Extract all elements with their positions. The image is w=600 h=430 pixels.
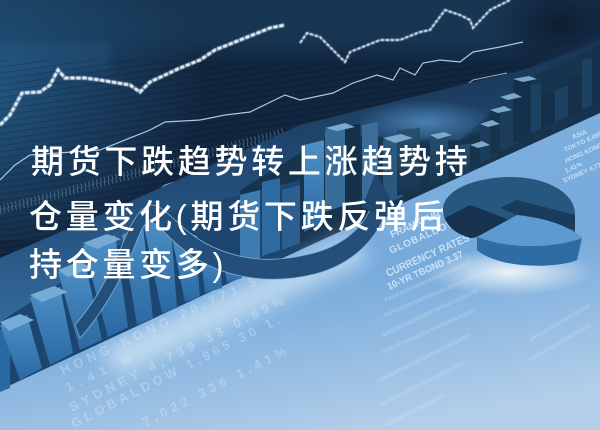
stock line charts xyxy=(0,0,523,212)
title xyxy=(29,143,471,283)
volume ticks xyxy=(0,130,285,212)
title: 期货下跌趋势转上涨趋势持 xyxy=(31,143,471,180)
arrow head xyxy=(362,172,397,218)
white trend line, right xyxy=(300,0,510,62)
pie chart xyxy=(443,177,582,266)
title: 仓量变化(期货下跌反弹后 xyxy=(29,198,447,235)
left-hand blue bars xyxy=(0,140,324,392)
floor market data text: HONG KONG 20,771 3 xyxy=(58,272,261,378)
pie slice xyxy=(477,215,582,266)
floor market data text: 1.41 % xyxy=(63,351,135,395)
light floor xyxy=(0,113,600,430)
top-right floor labels xyxy=(562,129,600,185)
left bar tops xyxy=(0,231,198,331)
floor data columns, right xyxy=(384,206,471,293)
second line chart xyxy=(0,42,523,180)
white candlestick trend line xyxy=(0,25,285,125)
floor data columns, right: 10-YR TBOND 3.37 xyxy=(386,249,465,293)
floor glow along bars xyxy=(100,235,595,375)
right-hand dark bars xyxy=(240,45,600,275)
bar tops xyxy=(325,76,537,148)
floor market data text: SYDNEY 4,739 33 0.69% xyxy=(67,293,287,415)
title: 持仓量变多) xyxy=(29,246,227,283)
faint rates list xyxy=(380,262,590,425)
top-right floor labels: 1.41% xyxy=(564,161,584,175)
swoosh arrow xyxy=(75,172,397,338)
floor data columns, right: FRANKFURT xyxy=(389,206,448,241)
floor market data text: 7,022 336 1.41% xyxy=(140,343,289,430)
floor data columns, right: GLOBALDOW xyxy=(388,217,458,257)
floor market data text: GLOBALDOW 1,965 30 1. xyxy=(69,312,282,430)
top-right floor labels: ASIA xyxy=(571,129,589,141)
floor data columns, right: CURRENCY RATES xyxy=(384,232,471,280)
third line chart xyxy=(140,73,507,205)
